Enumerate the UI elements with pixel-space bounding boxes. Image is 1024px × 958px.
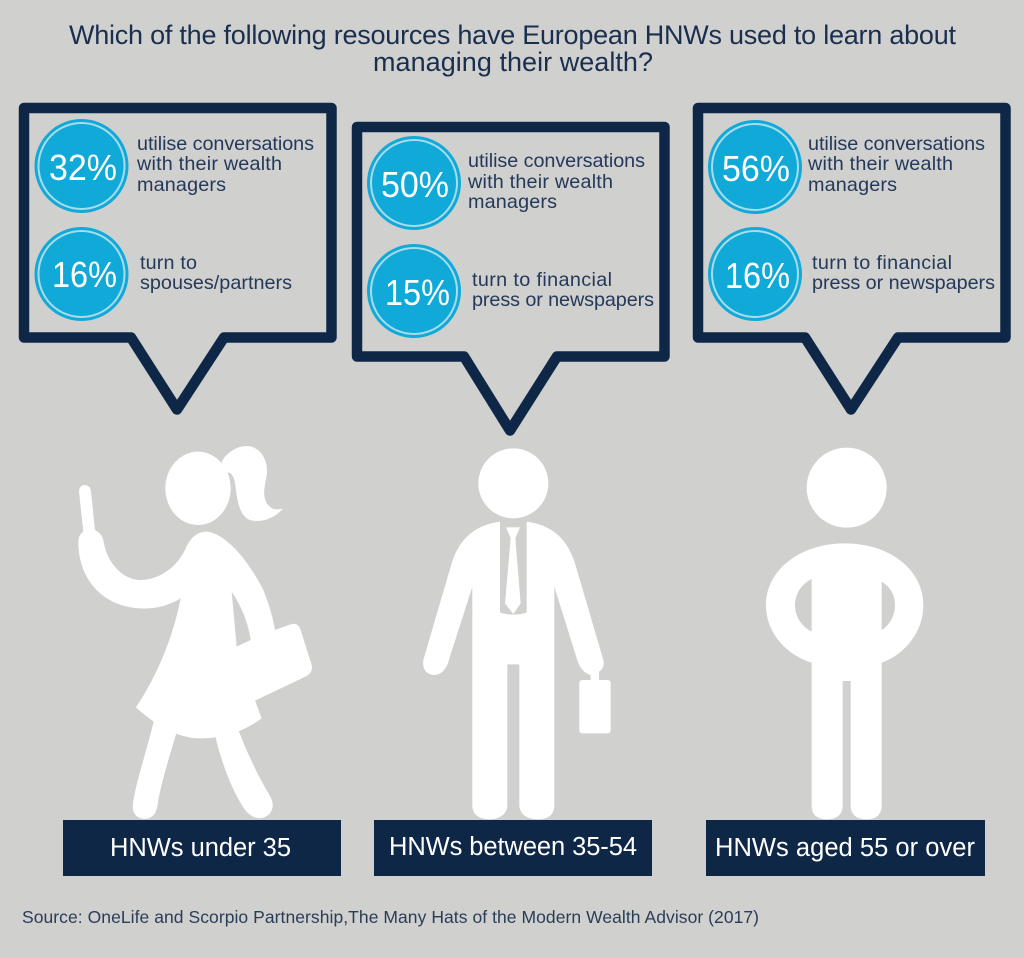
stat text: conversations: managers bbox=[137, 174, 226, 196]
icon: person with hands on hips bbox=[766, 448, 923, 819]
stat text: conversations: utilise conversations bbox=[808, 133, 985, 155]
stat badge: 56% bbox=[708, 120, 802, 214]
label: HNWs aged 55 or over: HNWs aged 55 or over bbox=[715, 834, 976, 862]
title: managing their wealth? bbox=[373, 47, 653, 77]
stat badge: 16% bbox=[708, 227, 802, 321]
label: HNWs under 35: HNWs under 35 bbox=[110, 834, 291, 862]
stat badge: 15%: 15% bbox=[385, 272, 450, 313]
label: HNWs aged 55 or over bbox=[706, 820, 985, 876]
label: HNWs between 35-54: HNWs between 35-54 bbox=[389, 833, 637, 861]
stat text: conversations: with their wealth bbox=[467, 171, 613, 193]
label: HNWs between 35-54 bbox=[374, 820, 652, 876]
stat badge: 32%: 32% bbox=[49, 147, 117, 188]
speech bubble outline: 35-54 bbox=[357, 127, 664, 430]
label: HNWs under 35 bbox=[63, 820, 341, 876]
stat text: conversations bbox=[807, 133, 985, 196]
speech bubble outline: 55 or over bbox=[698, 108, 1006, 410]
stat text: spouses bbox=[140, 252, 292, 294]
source note: Source: OneLife and Scorpio Partnership,The Many Hats of the Modern Wealth Advisor (2017) bbox=[22, 907, 759, 927]
panel: under 35 speech bubble bbox=[24, 108, 332, 410]
stat text: conversations: managers bbox=[808, 174, 897, 196]
speech bubble outline: under 35 bbox=[24, 108, 332, 410]
stat text: financial press: press or newspapers bbox=[812, 272, 995, 294]
stat text: financial press: press or newspapers bbox=[472, 289, 654, 311]
stat text: financial press: turn to financial bbox=[472, 269, 612, 291]
stat text: conversations: managers bbox=[468, 191, 557, 213]
stat text: conversations: with their wealth bbox=[136, 153, 282, 175]
stat badge: 16%: 16% bbox=[52, 254, 117, 295]
stat badge: 16%: 16% bbox=[725, 255, 790, 296]
stat text: conversations bbox=[467, 150, 645, 213]
stat badge: 32% bbox=[34, 119, 128, 213]
stat text: financial press bbox=[472, 269, 654, 311]
title bbox=[69, 20, 956, 77]
stat text: spouses: turn to bbox=[140, 252, 197, 274]
stat text: spouses: spouses/partners bbox=[140, 272, 292, 294]
stat badge: 50% bbox=[367, 136, 461, 230]
icon: woman with phone and handbag bbox=[78, 446, 312, 819]
icon: man in suit with briefcase bbox=[423, 448, 611, 819]
stat text: conversations bbox=[136, 133, 314, 196]
stat badge: 15% bbox=[367, 244, 461, 338]
stat text: conversations: utilise conversations bbox=[468, 150, 645, 172]
panel: 35-54 speech bubble bbox=[357, 127, 664, 430]
stat badge: 56%: 56% bbox=[722, 148, 790, 189]
stat badge: 50%: 50% bbox=[381, 164, 449, 205]
title: Which of the following resources have European HNWs used to learn about bbox=[69, 20, 956, 50]
stat text: conversations: with their wealth bbox=[807, 153, 953, 175]
stat text: financial press: turn to financial bbox=[812, 252, 952, 274]
stat text: financial press bbox=[812, 252, 995, 294]
stat text: conversations: utilise conversations bbox=[137, 133, 314, 155]
stat badge: 16% bbox=[34, 227, 128, 321]
panel: 55 or over speech bubble bbox=[698, 108, 1006, 410]
